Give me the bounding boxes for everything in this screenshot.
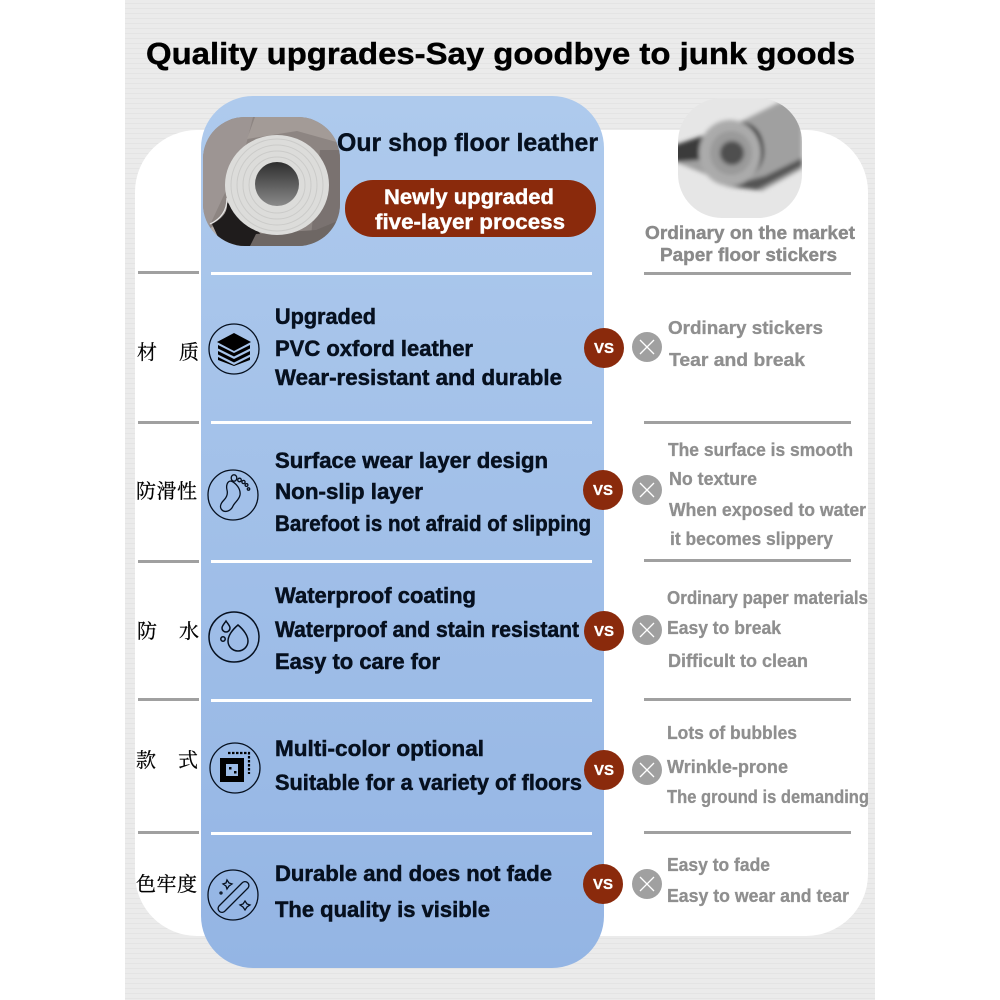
icon: magic wand <box>208 870 258 920</box>
cross icon <box>632 615 662 645</box>
vs badge <box>583 864 623 904</box>
heading: our shop floor leather: Our shop floor leather <box>337 129 598 157</box>
heading: ordinary on the market: Paper floor stickers <box>660 244 837 265</box>
text: our anti-slip: Barefoot is not afraid of slipping <box>275 511 591 536</box>
vs badge <box>584 328 624 368</box>
text: ordinary anti-slip <box>668 440 866 549</box>
row: colour fastness <box>136 855 849 922</box>
text: ordinary material: Ordinary stickers <box>668 318 823 338</box>
text: our waterproof: Easy to care for <box>275 649 440 674</box>
label: waterproof: 水 <box>179 620 199 643</box>
text: ordinary waterproof: Easy to break <box>667 618 782 638</box>
vs badge <box>584 611 624 651</box>
icon: water drops <box>209 612 259 662</box>
row: material <box>137 304 823 390</box>
text: our waterproof <box>275 583 580 674</box>
cross icon <box>632 755 662 785</box>
heading: ordinary on the market <box>645 222 855 265</box>
text: ordinary style <box>667 723 869 807</box>
text: our waterproof: Waterproof and stain resistant <box>275 617 580 642</box>
icon: colour swatch <box>210 743 260 793</box>
vs badge: VS <box>593 876 613 893</box>
white comparison panel <box>135 130 868 936</box>
vs badge: VS <box>594 762 614 779</box>
text: our material: Upgraded <box>275 304 376 329</box>
label: material <box>137 341 199 364</box>
text: our style: Suitable for a variety of floors <box>275 770 582 795</box>
badge: newly upgraded five-layer process: five-layer process <box>375 211 565 234</box>
image: white floor leather roll <box>203 117 340 246</box>
text: ordinary anti-slip: No texture <box>669 469 757 489</box>
label: colour fastness: 色牢度 <box>136 873 197 896</box>
text: ordinary anti-slip: The surface is smooth <box>668 440 853 460</box>
text: ordinary colour fastness: Easy to wear and tear <box>667 886 849 906</box>
cross icon <box>632 475 662 505</box>
row: anti-slip <box>136 440 866 549</box>
badge: newly upgraded five-layer process <box>345 180 596 237</box>
label: waterproof: 防 <box>137 620 157 643</box>
text: ordinary colour fastness <box>667 855 849 906</box>
text: ordinary material <box>668 318 823 370</box>
label: waterproof <box>137 620 199 643</box>
text: our anti-slip <box>275 448 591 536</box>
cross icon <box>632 869 662 899</box>
vs badge <box>584 750 624 790</box>
title: Quality upgrades-Say goodbye to junk goods <box>146 36 855 71</box>
textured background <box>125 0 875 1000</box>
label: material: 质 <box>179 341 199 364</box>
text: ordinary waterproof <box>667 588 868 671</box>
text: our style <box>275 736 582 795</box>
icon: layers <box>209 324 259 374</box>
text: ordinary material: Tear and break <box>669 350 806 370</box>
heading: ordinary on the market: Ordinary on the market <box>645 222 855 243</box>
text: ordinary waterproof: Ordinary paper materials <box>667 588 868 608</box>
text: our colour fastness: Durable and does not fade <box>275 861 552 886</box>
text: our colour fastness: The quality is visible <box>275 897 490 922</box>
text: our anti-slip: Non-slip layer <box>275 479 423 504</box>
icon: foot <box>208 470 258 520</box>
row: style <box>136 723 869 807</box>
label: anti-slip: 防滑性 <box>136 480 197 503</box>
text: ordinary anti-slip: it becomes slippery <box>670 529 833 549</box>
text: our waterproof: Waterproof coating <box>275 583 476 608</box>
cross icon <box>632 332 662 362</box>
text: ordinary style: Wrinkle-prone <box>667 757 788 777</box>
text: ordinary style: Lots of bubbles <box>667 723 797 743</box>
text: our anti-slip: Surface wear layer design <box>275 448 548 473</box>
text: ordinary style: The ground is demanding <box>667 787 869 807</box>
blue panel: our shop <box>201 96 604 968</box>
vs badge: VS <box>594 623 614 640</box>
vs badge <box>583 470 623 510</box>
label: style: 式 <box>178 749 198 772</box>
text: ordinary waterproof: Difficult to clean <box>668 651 808 671</box>
text: our colour fastness <box>275 861 552 922</box>
row: waterproof <box>137 583 868 674</box>
text: ordinary anti-slip: When exposed to water <box>669 500 866 520</box>
vs badge: VS <box>593 482 613 499</box>
text: our material <box>275 304 562 390</box>
label: material: 材 <box>137 341 157 364</box>
text: our material: Wear-resistant and durable <box>275 365 562 390</box>
label: style <box>136 749 198 772</box>
badge: newly upgraded five-layer process: Newly upgraded <box>384 186 554 209</box>
image: ordinary paper sticker roll <box>672 98 802 218</box>
vs badge: VS <box>594 340 614 357</box>
text: our style: Multi-color optional <box>275 736 484 761</box>
text: our material: PVC oxford leather <box>275 336 473 361</box>
text: ordinary colour fastness: Easy to fade <box>667 855 770 875</box>
label: style: 款 <box>136 749 156 772</box>
